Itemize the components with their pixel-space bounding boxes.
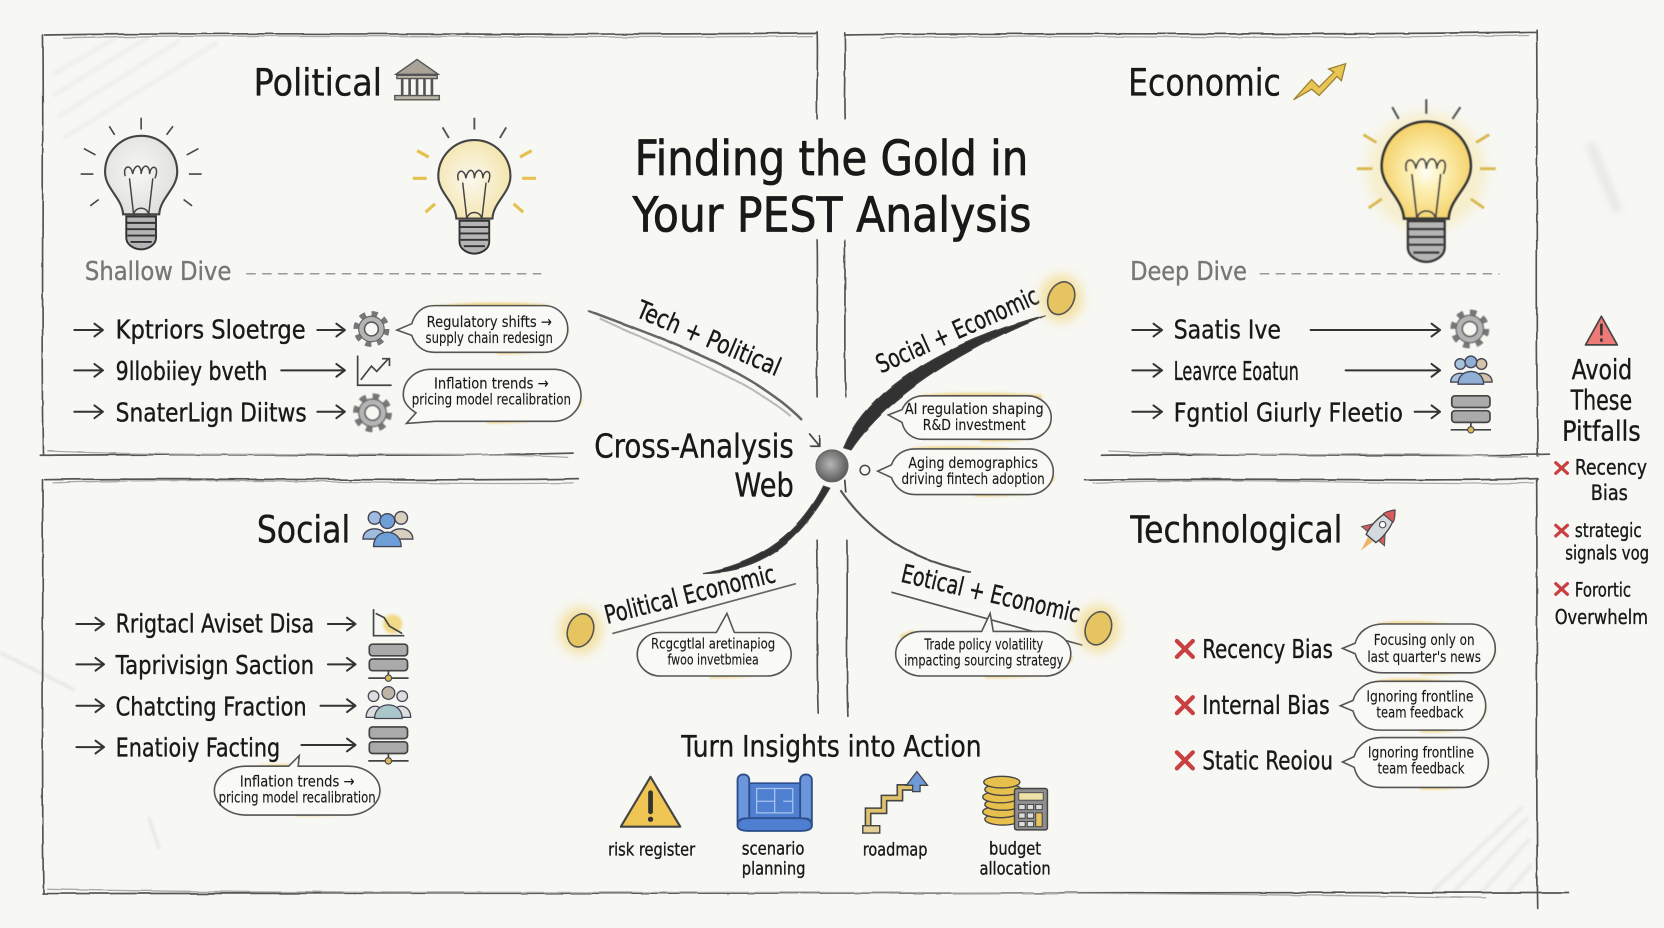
list: Political factors: 9llobiiey bveth (116, 357, 267, 387)
icon: lit lightbulb (413, 118, 536, 254)
link: Political Economic (601, 559, 796, 634)
pitfall: strategic signals: strategic (1575, 519, 1642, 542)
callout: regional reshaping (637, 613, 791, 676)
link: Political Economic: Political Economic (601, 559, 779, 631)
list: pitfalls with explanations: Internal Bias (1202, 691, 1330, 721)
heading: Political: Political (254, 62, 382, 105)
list: Social factors: Chatcting Fraction (116, 692, 307, 722)
list: Political factors: Kptriors Sloetrge (116, 316, 306, 346)
connector curves (589, 311, 1045, 573)
pitfall: Recency Bias: Bias (1591, 481, 1628, 506)
callout: inflation trends: Inflation trends → (434, 374, 549, 392)
pitfall: strategic signals (1556, 519, 1649, 564)
label: Shallow Dive: Shallow Dive (85, 257, 231, 287)
link label: Tech + Political: Tech + Political (631, 295, 785, 383)
heading: Cross-Analysis Web: Web (734, 466, 794, 505)
list: Social factors: Enatioiy Facting (116, 734, 280, 764)
title (632, 132, 1032, 243)
list: Economic factors (1132, 316, 1440, 428)
central node (816, 450, 870, 482)
action: budget allocation: allocation (980, 858, 1051, 879)
heading: Avoid These Pitfalls: Pitfalls (1562, 414, 1641, 447)
heading: Avoid These Pitfalls (1562, 353, 1641, 447)
callout: ignoring frontline feedback: team feedback (1376, 703, 1463, 721)
list: Economic factors: Leavrce Eoatun (1174, 357, 1299, 387)
action: risk register (608, 777, 696, 860)
pitfall: Overwhelm: Forortic (1575, 578, 1631, 601)
callout: trade policy: impacting sourcing strategy (904, 651, 1063, 669)
callout: inflation trends (403, 369, 581, 423)
callout: regional reshaping: Rcgcgtlal aretinapiog (651, 636, 775, 652)
callout: AI regulation: AI regulation shaping (905, 400, 1044, 418)
icon: server (1451, 396, 1491, 433)
diagram: Cross-Analysis Web (559, 275, 1120, 676)
callout: regional reshaping: fwoo invetbmiea (668, 652, 759, 668)
panel: Political (40, 32, 817, 457)
pitfall: Recency Bias (1556, 455, 1647, 506)
icon: falling chart (374, 609, 404, 636)
action: risk register: risk register (608, 839, 696, 860)
heading: Cross-Analysis Web: Cross-Analysis (594, 426, 794, 465)
callout: aging demographics: Aging demographics (908, 454, 1038, 472)
action: roadmap (863, 772, 928, 860)
callout: inflation trends: Inflation trends → (240, 772, 355, 790)
action: scenario planning: planning (742, 858, 805, 879)
callout: ignoring frontline feedback (1342, 738, 1488, 788)
heading: Cross-Analysis Web (594, 426, 794, 505)
callout: trade policy (896, 613, 1071, 676)
list: pitfalls with explanations: Recency Bias (1202, 635, 1333, 665)
heading: Social: Social (257, 508, 350, 551)
title: Finding the Gold in (635, 132, 1028, 187)
icon: people group (366, 687, 411, 718)
icon: gear (356, 314, 387, 344)
action: roadmap: roadmap (863, 839, 928, 860)
callout: ignoring frontline feedback: Ignoring frontline (1368, 744, 1474, 762)
action: budget allocation: budget (989, 838, 1041, 859)
panel: Technological (1085, 479, 1538, 908)
callout: ignoring frontline feedback (1340, 681, 1486, 730)
action: scenario planning: scenario (742, 838, 804, 859)
icon: rising arrow (1294, 64, 1346, 100)
callout: inflation trends: pricing model recalibration (219, 788, 376, 806)
callout: regulatory shifts: Regulatory shifts → (427, 313, 552, 331)
icon: gold coin (559, 607, 602, 654)
callout: aging demographics (878, 448, 1053, 495)
heading: Turn Insights into Action: Turn Insights into Action (680, 730, 982, 765)
panel: Social (42, 479, 1568, 898)
icon: line chart (358, 356, 392, 385)
callout: AI regulation (888, 395, 1051, 439)
callout: AI regulation: R&D investment (923, 416, 1026, 434)
icon: gold coin (1077, 605, 1120, 652)
link: Eotical + Economic: Eotical + Economic (898, 559, 1083, 629)
action: scenario planning (738, 774, 812, 879)
heading: Avoid These Pitfalls: Avoid (1572, 353, 1632, 386)
icon: people (1451, 356, 1492, 384)
list: Political factors (74, 316, 345, 428)
callout: regulatory shifts (397, 305, 568, 352)
icon: gear (356, 396, 389, 429)
callout: trade policy: Trade policy volatility (924, 635, 1043, 653)
list: Economic factors: Saatis Ive (1174, 316, 1281, 346)
icon: warning triangle (1585, 316, 1617, 345)
list: Social factors: Taprivisign Saction (115, 651, 314, 681)
icon: people (363, 512, 413, 547)
action: budget allocation (980, 776, 1051, 879)
callout: focusing only on (1342, 623, 1495, 673)
heading: Economic: Economic (1128, 62, 1281, 105)
link label: Social + Economic: Social + Economic (871, 281, 1044, 380)
callout: focusing only on: Focusing only on (1374, 631, 1475, 649)
section: Avoid These Pitfalls (1555, 316, 1649, 629)
pitfall: Overwhelm (1555, 578, 1648, 629)
list: pitfalls with explanations: Static Reoiou (1202, 746, 1333, 776)
heading: Avoid These Pitfalls: These (1570, 384, 1632, 417)
callout: ignoring frontline feedback: team feedback (1377, 760, 1465, 778)
icon: gold coin (1040, 275, 1082, 322)
callout: focusing only on: last quarter's news (1367, 648, 1481, 666)
callout: regulatory shifts: supply chain redesign (426, 329, 553, 347)
list: Economic factors: Fgntiol Giurly Fleetio (1174, 398, 1403, 428)
list: Social factors: Rrigtacl Aviset Disa (116, 609, 314, 639)
icon: bright lightbulb (1357, 99, 1496, 262)
callout: ignoring frontline feedback: Ignoring frontline (1366, 687, 1474, 705)
icon: rocket (1349, 500, 1406, 560)
label: Deep Dive: Deep Dive (1130, 257, 1247, 287)
pitfall: Recency Bias: Recency (1575, 455, 1647, 480)
callout: inflation trends (214, 756, 380, 815)
panel: Economic (844, 30, 1549, 457)
icon: dim lightbulb (81, 118, 202, 249)
callout: inflation trends: pricing model recalibration (412, 390, 571, 408)
icon: server (368, 727, 409, 764)
list: Political factors: SnaterLign Diitws (116, 398, 307, 428)
faint smudge (1590, 143, 1618, 212)
title: Your PEST Analysis (632, 188, 1032, 243)
icon: gear (1453, 312, 1486, 346)
section: Turn Insights into Action (608, 730, 1051, 879)
heading: Technological: Technological (1129, 508, 1342, 551)
list: Social factors (76, 609, 356, 764)
list: pitfalls with explanations (1177, 635, 1333, 776)
callout: aging demographics: driving fintech adoption (902, 470, 1045, 488)
icon: government building (395, 59, 439, 100)
icon: server (368, 644, 409, 681)
